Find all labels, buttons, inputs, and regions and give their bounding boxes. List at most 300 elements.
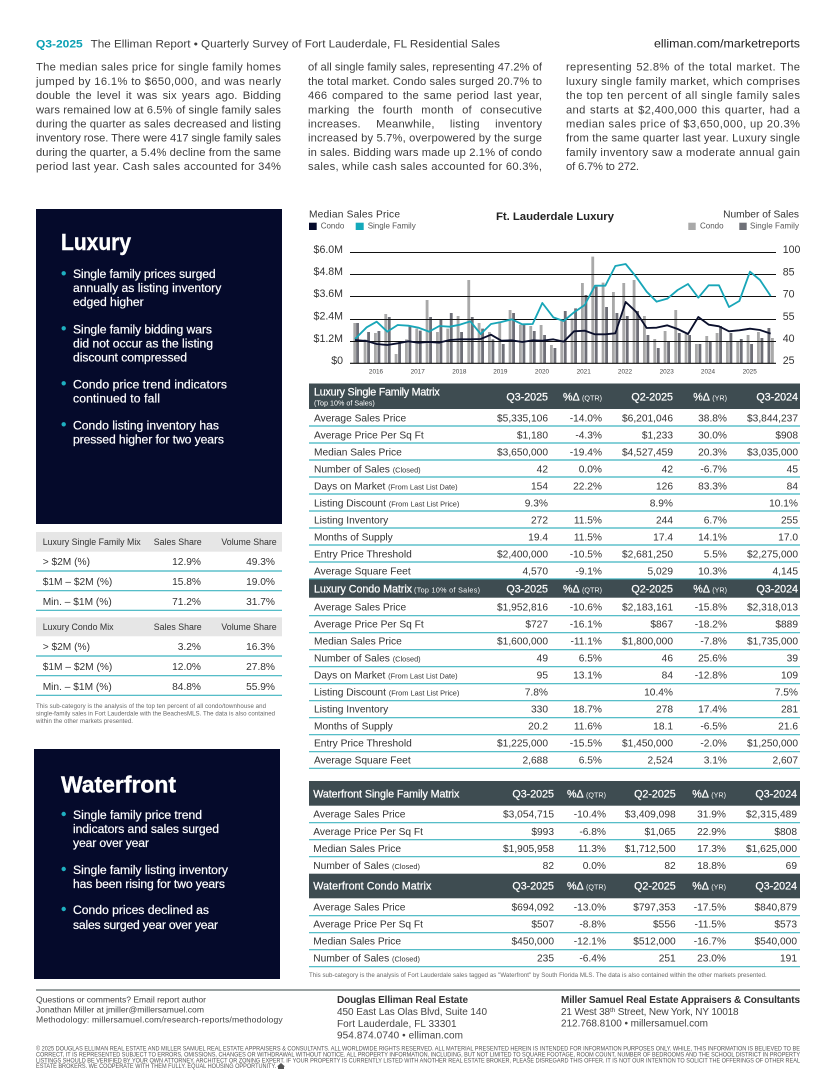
row: median sales price: -11.1%: [570, 637, 602, 648]
row: average sales price: Average Sales Price: [314, 603, 406, 614]
row: listing discount: 10.1%: [769, 499, 798, 510]
row: number of sales: 69: [786, 861, 797, 872]
right legend: [688, 210, 799, 231]
row: months of supply: 14.1%: [698, 533, 727, 544]
bullet: condo listing inventory: Condo listing inventory has: [73, 418, 219, 432]
row: number of sales: 42: [662, 465, 673, 476]
left axis labels: $1.2M: [314, 333, 343, 345]
footer: Miller Samuel address: 212.768.8100 • millersamuel.com: [561, 1018, 708, 1030]
matrix header: Q2-2025: [634, 789, 676, 801]
row: average price per sq ft: Average Price Per Sq Ft: [314, 620, 424, 631]
report title: The Elliman Report • Quarterly Survey of Fort Lauderdale, FL Residential Sales: [91, 39, 500, 51]
row: average sales price: $2,315,489: [746, 810, 797, 821]
year labels: 2022: [618, 368, 633, 375]
row: listing inventory: 18.7%: [573, 705, 602, 716]
row: median sales price: -12.1%: [574, 937, 606, 948]
intro text column 1: The median sales price for single family homes: [36, 62, 281, 74]
mix row over 2M: 12.9%: [172, 557, 201, 568]
row: average price per sq ft: [314, 620, 798, 631]
row: average price per sq ft: $507: [531, 920, 554, 931]
row: days on market: [314, 482, 798, 493]
row: average price per sq ft: Average Price Per Sq Ft: [313, 827, 423, 838]
mix header: Luxury Condo Mix: [43, 622, 114, 632]
row: median sales price: -16.7%: [694, 937, 726, 948]
row: median sales price: $540,000: [754, 937, 797, 948]
row: average price per sq ft: Average Price Per Sq Ft: [313, 920, 423, 931]
matrix header: Q3-2024: [756, 392, 798, 404]
note: luxury sub-category: This sub-category is the analysis of the top ten percent of all condo/townhouse and: [36, 703, 266, 710]
left legend: Single Family: [368, 222, 416, 231]
row: entry price threshold: [314, 550, 798, 561]
year labels: 2016: [369, 368, 384, 375]
matrix header: %Δ (YR): [692, 880, 726, 892]
row: listing discount: Listing Discount (From Last List Price): [314, 688, 459, 699]
heading: Waterfront: Waterfront: [61, 772, 176, 798]
row: average square feet: 2,524: [648, 756, 673, 767]
bars: condo sales: [353, 257, 774, 363]
table: waterfront single family matrix: [309, 781, 800, 872]
row: average sales price: -14.0%: [570, 414, 602, 425]
row: median sales price: $450,000: [512, 937, 554, 948]
matrix header: Waterfront Single Family Matrix: [313, 789, 460, 801]
row: average price per sq ft: $1,180: [517, 431, 548, 442]
legal disclaimer: ESTATE BROKERS. WE COOPERATE WITH THEM FULLY. EQUAL HOUSING OPPORTUNITY.: [36, 1064, 276, 1070]
row: listing discount: [314, 688, 798, 699]
mix row 1M to 2M: 27.8%: [246, 662, 275, 673]
bullet: single family prices: edged higher: [73, 295, 144, 309]
row: number of sales: [313, 954, 797, 965]
row: entry price threshold: $1,225,000: [497, 739, 548, 750]
intro text column 2: sales, while cash sales accounted for 60.3%,: [308, 161, 542, 173]
row: median sales price: $1,905,958: [503, 844, 554, 855]
row: entry price threshold: Entry Price Threshold: [314, 550, 412, 561]
row: average sales price: -10.4%: [574, 810, 606, 821]
mix row 1M to 2M: 12.0%: [172, 662, 201, 673]
row: average price per sq ft: -8.8%: [579, 920, 606, 931]
row: median sales price: $3,035,000: [747, 448, 798, 459]
matrix header: Q3-2025: [512, 880, 554, 892]
row: median sales price: Median Sales Price: [313, 844, 401, 855]
row: listing inventory: 278: [656, 705, 673, 716]
intro text column 2: increases. Meanwhile, listing inventory: [308, 118, 542, 130]
note: luxury sub-category: within the other markets presented.: [35, 718, 133, 725]
intro text column 3: representing 52.8% of the total market. The: [566, 62, 800, 74]
matrix header: %Δ (YR): [693, 392, 727, 404]
bullet: condo price trend: continued to fall: [73, 391, 160, 405]
bullet: condo price trend: [62, 377, 227, 405]
row: months of supply: 19.4: [528, 533, 548, 544]
year labels: 2021: [577, 368, 591, 375]
row: months of supply: 11.6%: [574, 722, 602, 733]
row: months of supply: Months of Supply: [314, 533, 394, 544]
footer: Miller Samuel address: [561, 995, 800, 1030]
year labels: 2024: [701, 368, 716, 375]
intro text column 2: in sales. Bidding wars made up 2.1% of condo: [308, 147, 542, 159]
row: average price per sq ft: $556: [653, 920, 676, 931]
footer: Douglas Elliman address: Douglas Elliman Real Estate: [337, 995, 468, 1006]
row: average square feet: 5,029: [648, 567, 673, 578]
row: average square feet: 2,688: [522, 756, 548, 767]
mix row over 2M: 49.3%: [246, 557, 275, 568]
row: average sales price: [314, 603, 798, 614]
right axis labels: 40: [783, 333, 795, 345]
row: average sales price: [314, 414, 798, 425]
matrix header: [313, 789, 797, 801]
report quarter: Q3-2025: [36, 39, 83, 51]
row: number of sales: Number of Sales (Closed): [314, 654, 421, 665]
row: listing inventory: 281: [781, 705, 798, 716]
row: entry price threshold: 5.5%: [704, 550, 727, 561]
row: average square feet: 3.1%: [704, 756, 727, 767]
row: average square feet: Average Square Feet: [314, 567, 411, 578]
mix header: Sales Share: [154, 622, 202, 632]
row: number of sales: Number of Sales (Closed): [313, 954, 420, 965]
plot area: [350, 252, 776, 363]
intro text column 2: increased by 5.7%, overpowered by the surge: [308, 133, 542, 145]
row: number of sales: [313, 861, 797, 872]
intro text column 2: marking the fourth month of consecutive: [308, 104, 542, 116]
row: average price per sq ft: -6.8%: [579, 827, 606, 838]
row: average sales price: -15.8%: [695, 603, 727, 614]
bullet: bidding wars: Single family bidding wars: [73, 322, 212, 336]
table: waterfront condo matrix: [309, 874, 800, 967]
row: average price per sq ft: $1,065: [645, 827, 676, 838]
row: number of sales: 82: [543, 861, 554, 872]
right legend: Number of Sales: [723, 210, 799, 221]
row: entry price threshold: [314, 739, 798, 750]
chart: Ft. Lauderdale Luxury: [309, 210, 800, 375]
row: months of supply: 17.4: [653, 533, 673, 544]
row: average square feet: 2,607: [772, 756, 798, 767]
left axis labels: $2.4M: [314, 311, 343, 323]
row: average sales price: -10.6%: [570, 603, 602, 614]
matrix header: [314, 387, 798, 407]
intro text column 3: median sales price of $3,650,000, up 20.3%: [566, 118, 800, 130]
row: listing discount: 9.3%: [525, 499, 548, 510]
left legend: Condo: [321, 222, 345, 231]
year labels: 2025: [743, 368, 757, 375]
row: listing inventory: [314, 705, 798, 716]
row: average sales price: Average Sales Price: [314, 414, 406, 425]
matrix header: Q3-2025: [512, 789, 554, 801]
left axis labels: [314, 244, 343, 367]
mix header: Sales Share: [154, 537, 202, 547]
row: number of sales: 25.6%: [698, 654, 727, 665]
row: days on market: 126: [656, 482, 673, 493]
row: number of sales: 42: [537, 465, 548, 476]
row: entry price threshold: $1,250,000: [747, 739, 798, 750]
row: number of sales: 6.5%: [579, 654, 602, 665]
row: days on market: 22.2%: [573, 482, 602, 493]
row: median sales price: Median Sales Price: [313, 937, 401, 948]
row: number of sales: 235: [537, 954, 554, 965]
row: median sales price: [313, 844, 797, 855]
year labels: 2019: [493, 368, 508, 375]
line: single family median price: [355, 264, 771, 339]
bullet: price trend: indicators and sales surged: [73, 822, 219, 836]
row: median sales price: $3,650,000: [497, 448, 548, 459]
intro text column 1: [35, 62, 281, 173]
row: median sales price: Median Sales Price: [314, 637, 402, 648]
footer: Douglas Elliman address: [337, 995, 487, 1042]
mix row 1M to 2M: $1M – $2M (%): [43, 577, 112, 588]
footer: Douglas Elliman address: 450 East Las Olas Blvd, Suite 140: [337, 1007, 487, 1018]
footer: Miller Samuel address: th: [610, 1007, 616, 1014]
footer: Douglas Elliman address: Fort Lauderdale, FL 33301: [337, 1019, 457, 1030]
matrix header: Q2-2025: [631, 392, 673, 404]
row: days on market: 109: [781, 671, 798, 682]
icon: equal housing: [277, 1063, 285, 1069]
row: days on market: -12.8%: [695, 671, 727, 682]
row: average square feet: [314, 756, 798, 767]
matrix header: Waterfront Condo Matrix: [313, 880, 432, 892]
mix row min to 1M: 31.7%: [246, 597, 275, 608]
bullet: single family prices: Single family prices surged: [73, 267, 216, 281]
right axis labels: 100: [783, 244, 800, 256]
right legend: Condo: [700, 222, 724, 231]
matrix header: %Δ (QTR): [563, 392, 602, 404]
footer: contact questions: Methodology: millersamuel.com/research-reports/methodology: [36, 1015, 283, 1025]
row: average price per sq ft: $1,233: [642, 431, 673, 442]
mix header: Luxury Single Family Mix: [43, 537, 141, 547]
row: median sales price: $1,735,000: [747, 637, 798, 648]
matrix header: %Δ (QTR): [563, 584, 602, 596]
row: number of sales: 0.0%: [583, 861, 606, 872]
row: median sales price: $1,625,000: [746, 844, 797, 855]
row: entry price threshold: -2.0%: [700, 739, 727, 750]
row: number of sales: 49: [537, 654, 548, 665]
row: days on market: 154: [531, 482, 548, 493]
row: days on market: 13.1%: [573, 671, 602, 682]
row: average sales price: [313, 810, 797, 821]
matrix header: Q3-2025: [506, 392, 548, 404]
row: months of supply: 20.2: [528, 722, 548, 733]
row: average sales price: -13.0%: [574, 903, 606, 914]
mix row 1M to 2M: 19.0%: [246, 577, 275, 588]
row: months of supply: 18.1: [653, 722, 673, 733]
row: average sales price: $840,879: [754, 903, 797, 914]
row: median sales price: $4,527,459: [622, 448, 673, 459]
intro text column 3: family inventory saw a moderate annual gain: [566, 147, 800, 159]
row: months of supply: [314, 722, 798, 733]
chart title: Ft. Lauderdale Luxury: [496, 211, 615, 223]
matrix header: (Top 10% of Sales): [414, 586, 480, 595]
matrix header: Q2-2025: [631, 584, 673, 596]
mix row min to 1M: 71.2%: [172, 597, 201, 608]
report url: elliman.com/marketreports: [654, 38, 800, 51]
intro text column 2: 466 compared to the same period last year,: [308, 90, 542, 102]
matrix header: [313, 880, 797, 892]
row: listing discount: [314, 499, 798, 510]
mix row min to 1M: Min. – $1M (%): [43, 597, 112, 608]
row: listing inventory: Listing Inventory: [314, 516, 389, 527]
row: average sales price: $797,353: [633, 903, 676, 914]
row: number of sales: 18.8%: [697, 861, 726, 872]
row: days on market: 95: [537, 671, 548, 682]
year labels: [369, 368, 757, 375]
row: average price per sq ft: [313, 920, 797, 931]
panel: waterfront highlights: [34, 749, 280, 979]
footer: Douglas Elliman address: 954.874.0740 • elliman.com: [337, 1030, 463, 1042]
row: median sales price: [313, 937, 797, 948]
row: entry price threshold: $2,275,000: [747, 550, 798, 561]
bullet: bidding wars: did not occur as the listing: [73, 336, 213, 350]
note: waterfront sub-category: This sub-category is the analysis of Fort Lauderdale sales tagged as "Waterfront" by South Florida MLS. The data is also contained within the other markets presented.: [309, 972, 767, 979]
row: average sales price: $2,318,013: [747, 603, 798, 614]
row: average square feet: 4,145: [772, 567, 798, 578]
bullet: listing inventory: Single family listing inventory: [73, 863, 229, 877]
bullet: price trend: [62, 808, 219, 850]
row: listing inventory: Listing Inventory: [314, 705, 389, 716]
matrix header: %Δ (QTR): [567, 789, 606, 801]
row: average price per sq ft: $889: [775, 620, 798, 631]
row: months of supply: [314, 533, 798, 544]
mix row min to 1M: 55.9%: [246, 682, 275, 693]
row: average price per sq ft: $573: [774, 920, 797, 931]
mix row over 2M: > $2M (%): [43, 557, 90, 568]
row: average sales price: Average Sales Price: [313, 810, 406, 821]
right axis labels: [783, 244, 800, 367]
panel: luxury highlights: [36, 209, 282, 524]
row: listing inventory: 255: [781, 516, 798, 527]
mix header: Volume Share: [221, 622, 277, 632]
row: days on market: 83.3%: [698, 482, 727, 493]
left axis labels: $6.0M: [314, 244, 343, 256]
row: listing discount: 8.9%: [650, 499, 673, 510]
row: months of supply: -6.5%: [700, 722, 727, 733]
row: median sales price: $1,800,000: [622, 637, 673, 648]
row: listing inventory: 244: [656, 516, 673, 527]
bullet: price trend: year over year: [73, 836, 149, 850]
table: luxury single family mix: [36, 532, 282, 610]
row: listing inventory: 272: [531, 516, 548, 527]
intro text column 2: of all single family sales, representing 47.2% of: [308, 62, 543, 74]
row: listing discount: 10.4%: [644, 688, 673, 699]
bullet: condo listing inventory: pressed higher for two years: [73, 432, 224, 446]
intro text column 3: and starts at $2,400,000 this quarter, had a: [566, 104, 801, 116]
row: number of sales: 82: [664, 861, 676, 872]
mix row 1M to 2M: $1M – $2M (%): [43, 662, 112, 673]
bullet: price trend: Single family price trend: [73, 808, 202, 822]
row: average square feet: 4,570: [522, 567, 548, 578]
intro text column 1: period last year. Cash sales accounted for 34%: [36, 161, 281, 173]
left legend: Median Sales Price: [309, 210, 400, 221]
row: listing inventory: 17.4%: [698, 705, 727, 716]
matrix header: Q3-2024: [756, 584, 798, 596]
intro text column 2: the total market. Condo sales surged 20.7% to: [308, 76, 542, 88]
row: average price per sq ft: -16.1%: [570, 620, 602, 631]
matrix header: Q2-2025: [634, 880, 676, 892]
row: average price per sq ft: $727: [525, 620, 548, 631]
mix row min to 1M: [43, 597, 275, 608]
bullet: single family prices: [62, 267, 222, 309]
mix row over 2M: [43, 642, 275, 653]
right axis labels: 55: [783, 311, 795, 323]
mix row over 2M: 16.3%: [246, 642, 275, 653]
row: listing discount: 7.8%: [525, 688, 548, 699]
row: entry price threshold: -10.5%: [570, 550, 602, 561]
row: days on market: 84: [662, 671, 673, 682]
row: average price per sq ft: 30.0%: [698, 431, 727, 442]
row: number of sales: 39: [787, 654, 798, 665]
row: average price per sq ft: [314, 431, 798, 442]
row: median sales price: $1,712,500: [625, 844, 676, 855]
row: days on market: [314, 671, 798, 682]
row: average sales price: $3,409,098: [625, 810, 676, 821]
row: median sales price: [314, 448, 798, 459]
intro text column 3: luxury single family market, which comprises: [566, 76, 800, 88]
row: average price per sq ft: -11.5%: [694, 920, 726, 931]
row: number of sales: -6.7%: [700, 465, 727, 476]
right axis labels: 25: [783, 355, 795, 367]
footer: contact questions: Jonathan Miller at jmiller@millersamuel.com: [36, 1004, 204, 1014]
row: listing inventory: 6.7%: [704, 516, 727, 527]
row: days on market: 84: [787, 482, 798, 493]
row: entry price threshold: $2,681,250: [622, 550, 673, 561]
row: number of sales: 251: [659, 954, 676, 965]
row: entry price threshold: $1,450,000: [622, 739, 673, 750]
row: listing inventory: [314, 516, 798, 527]
row: average price per sq ft: -4.3%: [575, 431, 602, 442]
line: condo median price: [355, 302, 771, 345]
row: listing inventory: 330: [531, 705, 548, 716]
intro text column 1: jumped by 16.1% to $650,000, and was nearly: [35, 76, 281, 88]
row: median sales price: $1,600,000: [497, 637, 548, 648]
row: listing discount: Listing Discount (From Last List Price): [314, 499, 459, 510]
intro text column 3: from the same quarter last year. Luxury single: [566, 133, 800, 145]
matrix header: %Δ (YR): [693, 584, 727, 596]
bullet: condo prices: Condo prices declined as: [73, 903, 209, 917]
row: average sales price: $5,335,106: [497, 414, 548, 425]
year labels: 2020: [535, 368, 550, 375]
matrix header: [314, 584, 798, 596]
row: average sales price: $2,183,161: [622, 603, 673, 614]
left axis labels: $3.6M: [314, 288, 343, 300]
row: listing inventory: 11.5%: [574, 516, 602, 527]
mix header: [43, 622, 277, 632]
matrix header: Q3-2025: [506, 584, 548, 596]
row: average price per sq ft: [313, 827, 797, 838]
row: months of supply: 21.6: [778, 722, 798, 733]
row: average sales price: $1,952,816: [497, 603, 548, 614]
row: average price per sq ft: $867: [650, 620, 673, 631]
row: median sales price: 17.3%: [697, 844, 726, 855]
mix row min to 1M: Min. – $1M (%): [43, 682, 112, 693]
report header: [36, 38, 800, 51]
row: number of sales: 0.0%: [579, 465, 602, 476]
footer: contact questions: Questions or comments? Email report author: [36, 994, 206, 1004]
row: listing discount: 7.5%: [775, 688, 798, 699]
row: average sales price: $6,201,046: [622, 414, 673, 425]
bars: single family sales: [356, 287, 770, 363]
row: average square feet: [314, 567, 798, 578]
left axis labels: $0: [331, 355, 343, 367]
mix row 1M to 2M: 15.8%: [172, 577, 201, 588]
row: median sales price: 20.3%: [698, 448, 727, 459]
row: number of sales: [314, 654, 798, 665]
note: luxury sub-category: [35, 703, 275, 725]
row: average price per sq ft: $808: [774, 827, 797, 838]
matrix header: %Δ (QTR): [567, 880, 606, 892]
intro text column 1: during the quarter, a 5.4% decline from the same: [36, 147, 281, 159]
bullet: condo price trend: Condo price trend indicators: [73, 377, 227, 391]
intro text column 2: [308, 62, 543, 173]
mix header: Volume Share: [221, 537, 277, 547]
table: luxury condo matrix: [309, 580, 800, 768]
row: average price per sq ft: $993: [531, 827, 554, 838]
table: luxury condo mix: [36, 617, 282, 695]
right legend: Single Family: [750, 222, 799, 231]
